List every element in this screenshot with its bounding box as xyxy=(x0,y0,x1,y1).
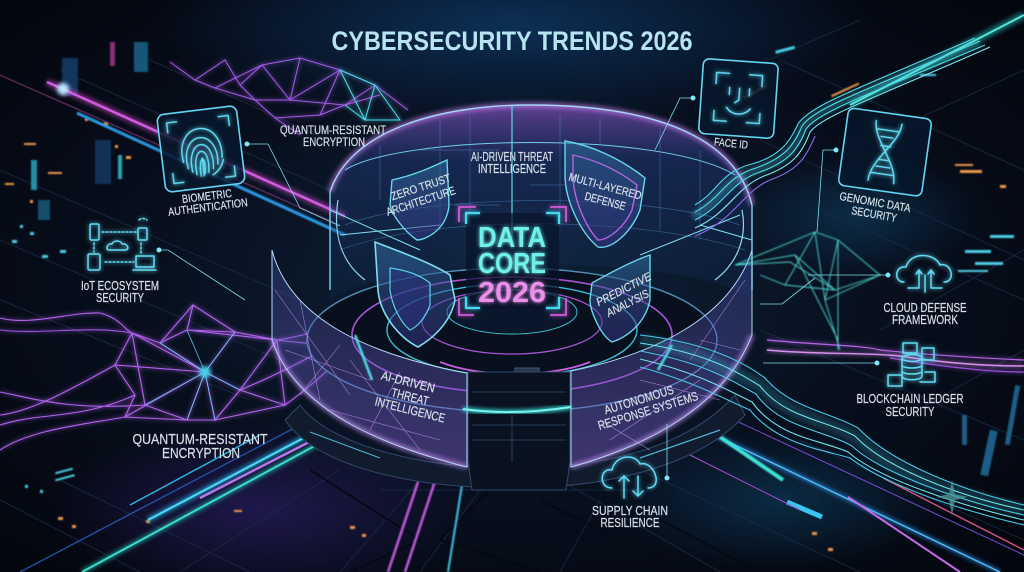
mesh network: right teal xyxy=(735,232,880,350)
label: quantum-resistant encryption lower: ENCRYPTION xyxy=(162,445,240,462)
light beam: upper right xyxy=(850,15,1024,105)
teal light bar xyxy=(463,407,571,412)
label: autonomous response systems: AUTONOMOUS xyxy=(603,383,675,417)
icon: cloud with arrows xyxy=(897,255,951,292)
icon: cloud with up and down arrows xyxy=(602,457,656,498)
panel: biometric authentication xyxy=(157,105,340,226)
light beams: bottom centre xyxy=(388,478,462,572)
panel: face ID: FACE ID xyxy=(713,136,749,152)
panel: supply chain resilience xyxy=(592,424,670,530)
data core panel: DATA xyxy=(478,222,546,254)
panel: supply chain resilience: RESILIENCE xyxy=(600,515,660,530)
lower glass wall: right xyxy=(571,250,752,467)
label: AI-driven threat intelligence lower: THREAT xyxy=(390,386,430,408)
data strands: upper right teal xyxy=(693,38,990,236)
label: AI-driven threat intelligence lower: INTELLIGENCE xyxy=(373,394,447,426)
panel: blockchain ledger security xyxy=(763,343,964,419)
panel: genomic data security: GENOMIC DATA xyxy=(839,191,912,215)
central core rings xyxy=(307,268,717,412)
label: autonomous response systems: RESPONSE SYSTEMS xyxy=(596,389,700,433)
shield: predictive analysis xyxy=(590,255,654,342)
mesh network: lower left purple xyxy=(0,303,400,450)
lower glass wall: left xyxy=(272,250,467,467)
icon: DNA helix xyxy=(838,108,932,197)
label: quantum-resistant encryption lower: QUANTUM-RESISTANT xyxy=(132,431,268,448)
base platform xyxy=(285,372,745,490)
label: AI-driven threat intelligence upper: AI-DRIVEN THREAT xyxy=(471,150,553,164)
label: quantum-resistant encryption lower xyxy=(132,431,268,462)
label: AI-driven threat intelligence upper: INTELLIGENCE xyxy=(478,162,546,176)
purple light lines right xyxy=(767,340,1024,372)
panel: genomic data security: SECURITY xyxy=(850,205,898,225)
panel: IoT ecosystem security: IoT ECOSYSTEM xyxy=(81,279,159,293)
shield: zero trust architecture xyxy=(385,160,457,240)
shield: multi-layered defense xyxy=(565,141,645,247)
data core panel: CORE xyxy=(478,248,546,280)
light beam: upper left xyxy=(0,75,345,235)
mesh hub: teal glow xyxy=(145,330,240,420)
panel: biometric authentication: BIOMETRIC xyxy=(181,188,233,206)
data strands: lower right teal xyxy=(640,335,1024,525)
label: AI-driven threat intelligence upper xyxy=(471,150,553,176)
light beams: bottom left xyxy=(20,425,320,572)
panel: cloud defense framework xyxy=(760,255,967,327)
shield: multi-layered defense: DEFENSE xyxy=(583,191,627,213)
panel: IoT ecosystem security: SECURITY xyxy=(96,291,145,305)
panel: supply chain resilience: SUPPLY CHAIN xyxy=(592,503,668,518)
data core panel xyxy=(459,207,566,315)
shield: predictive analysis: ANALYSIS xyxy=(604,288,651,320)
panel: IoT ecosystem security xyxy=(81,218,245,305)
shield: multi-layered defense: MULTI-LAYERED xyxy=(567,171,643,203)
icon: face scan xyxy=(698,59,778,139)
panel: cloud defense framework: FRAMEWORK xyxy=(892,312,958,327)
icon: fingerprint xyxy=(157,105,245,193)
light beams: bottom right xyxy=(690,418,1024,572)
dome: upper glass cylinder xyxy=(330,105,752,300)
data core panel: 2026 xyxy=(478,277,546,309)
sparkle xyxy=(936,480,968,516)
panel: biometric authentication: AUTHENTICATION xyxy=(168,197,248,219)
shield: predictive analysis: PREDICTIVE xyxy=(595,271,654,309)
label: quantum-resistant encryption upper: QUANTUM-RESISTANT xyxy=(280,123,387,137)
panel: cloud defense framework: CLOUD DEFENSE xyxy=(884,300,967,315)
icon: connected devices xyxy=(88,218,156,270)
panel: blockchain ledger security: BLOCKCHAIN LEDGER xyxy=(856,391,964,406)
shield: lower left emblem xyxy=(375,242,455,347)
icon: ledger blocks xyxy=(888,343,935,386)
panel: genomic data security xyxy=(817,108,932,232)
title: CYBERSECURITY TRENDS 2026 xyxy=(332,26,692,56)
panel: face ID xyxy=(655,59,778,152)
label: AI-driven threat intelligence lower xyxy=(373,369,447,426)
shield: zero trust architecture: ZERO TRUST xyxy=(390,173,452,203)
label: quantum-resistant encryption upper xyxy=(280,123,387,149)
label: quantum-resistant encryption upper: ENCRYPTION xyxy=(303,135,365,149)
label: AI-driven threat intelligence lower: AI-DRIVEN xyxy=(380,369,436,395)
panel: blockchain ledger security: SECURITY xyxy=(886,404,935,419)
mesh network: upper purple xyxy=(170,58,408,135)
shield: zero trust architecture: ARCHITECTURE xyxy=(385,185,457,219)
